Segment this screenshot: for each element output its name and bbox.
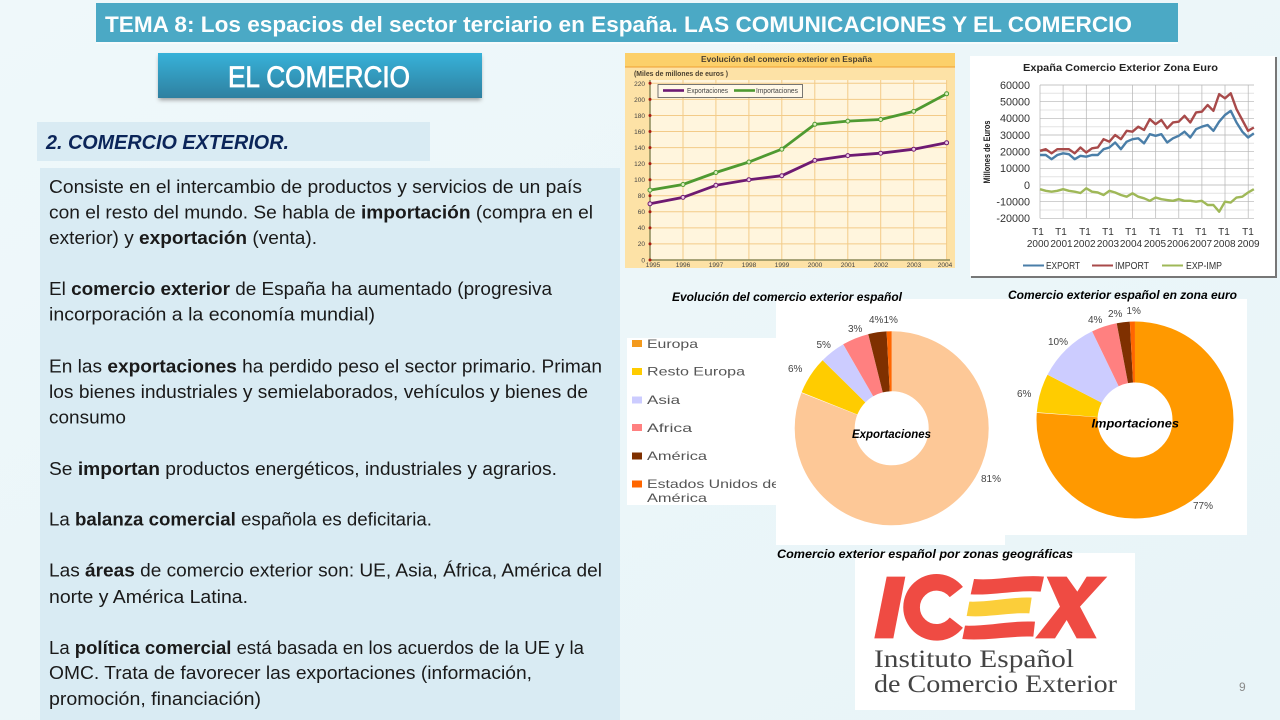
- percentage labels: 6%: [1017, 389, 1032, 400]
- x axis labels: 2002: [1073, 239, 1096, 250]
- paragraph: trade policy: La política comercial está basada en los acuerdos de la UE y la: [49, 638, 585, 658]
- x axis labels: 2007: [1190, 239, 1213, 250]
- legend: zonas geográficas: América: [647, 491, 707, 505]
- x axis labels: 1996: [676, 262, 691, 269]
- percentage labels: 5%: [816, 340, 831, 351]
- panel: body text: [40, 168, 620, 720]
- x axis labels: 2001: [841, 262, 856, 269]
- line: importaciones: [648, 92, 949, 192]
- x axis labels: T1: [1218, 227, 1230, 238]
- title text: TEMA 8: Los espacios del sector terciario en España. LAS COMUNICACIONES Y EL COMERCIO: [105, 12, 1132, 37]
- x axis labels: 2005: [1144, 239, 1167, 250]
- line chart: España Comercio Exterior Zona Euro: Expaña Comercio Exterior Zona Euro: [1023, 62, 1218, 74]
- paragraph: definition: Consiste en el intercambio de productos y servicios de un país: [49, 177, 582, 197]
- y axis labels: 40000: [1000, 113, 1030, 125]
- line chart: España Comercio Exterior Zona Euro: [970, 56, 1277, 278]
- heading button: EL COMERCIO: [158, 53, 482, 100]
- legend: zonas geográficas: Africa: [647, 421, 692, 435]
- logo: ICEX: de Comercio Exterior: [874, 671, 1118, 698]
- x axis labels: 2006: [1167, 239, 1190, 250]
- caption: zona euro: Comercio exterior español en zona euro: [1008, 288, 1237, 302]
- paragraph: areas: [49, 560, 602, 607]
- x axis labels: 1998: [742, 262, 757, 269]
- x axis labels: T1: [1195, 227, 1207, 238]
- y axis labels: 200: [634, 97, 645, 104]
- x axis labels: T1: [1079, 227, 1091, 238]
- paragraph: trade policy: OMC. Trata de favorecer las exportaciones (información,: [49, 663, 532, 683]
- x axis labels: T1: [1102, 227, 1114, 238]
- x axis labels: 2003: [907, 262, 922, 269]
- x axis labels: [1027, 227, 1260, 250]
- series lines: [1040, 93, 1254, 212]
- x axis labels: 1997: [709, 262, 724, 269]
- caption: evolución: Evolución del comercio exterior español: [672, 290, 903, 304]
- x axis labels: 2000: [1027, 239, 1050, 250]
- chart legend: Importaciones: [756, 88, 798, 95]
- legend: zonas geográficas: Asia: [647, 393, 680, 407]
- y axis labels: -20000: [996, 213, 1030, 225]
- y axis labels: 40: [638, 225, 645, 232]
- y axis labels: 20000: [1000, 146, 1030, 158]
- paragraph: exports: [49, 356, 602, 428]
- x axis labels: 2004: [938, 262, 953, 269]
- x axis labels: T1: [1149, 227, 1161, 238]
- y axis labels: 140: [634, 145, 645, 152]
- percentage labels: [1017, 306, 1213, 512]
- letter E: flag bands: [962, 576, 1044, 639]
- paragraph: trade policy: [49, 638, 585, 709]
- donut chart: exportaciones: [776, 299, 1005, 545]
- legend: zonas geográficas: [627, 337, 780, 505]
- chart legend: [1023, 260, 1222, 272]
- x axis labels: T1: [1032, 227, 1044, 238]
- x axis labels: 2003: [1097, 239, 1120, 250]
- caption: zonas geográficas: Comercio exterior español por zonas geográficas: [777, 547, 1073, 561]
- chart legend: IMPORT: [1115, 260, 1149, 272]
- percentage labels: 81%: [981, 474, 1001, 485]
- chart legend: EXP-IMP: [1186, 260, 1222, 272]
- percentage labels: [788, 315, 1001, 485]
- paragraph: imports: Se importan productos energéticos, industriales y agrarios.: [49, 459, 557, 479]
- paragraph: exports: consumo: [49, 408, 126, 428]
- paragraph: definition: [49, 177, 593, 248]
- percentage labels: 10%: [1048, 337, 1068, 348]
- y axis labels: 80: [638, 193, 645, 200]
- y axis labels: [634, 81, 645, 264]
- y axis labels: 50000: [1000, 96, 1030, 108]
- title bar: [96, 3, 1178, 44]
- letter X: [1035, 577, 1107, 638]
- y axis title: Millones de Euros: [982, 120, 992, 184]
- x axis labels: 2008: [1213, 239, 1236, 250]
- y axis labels: 20: [638, 241, 645, 248]
- percentage labels: 1%: [1126, 306, 1141, 317]
- x axis labels: T1: [1055, 227, 1067, 238]
- legend: zonas geográficas: América: [647, 449, 707, 463]
- paragraph: exports: En las exportaciones ha perdido peso el sector primario. Priman: [49, 356, 602, 376]
- legend: zonas geográficas: Estados Unidos de: [647, 477, 780, 491]
- x axis labels: 1999: [775, 262, 790, 269]
- letter C: [912, 582, 956, 632]
- paragraph: areas: Las áreas de comercio exterior son: UE, Asia, África, América del: [49, 560, 602, 580]
- x axis labels: 2002: [874, 262, 889, 269]
- y axis labels: 60000: [1000, 80, 1030, 92]
- x axis labels: 1995: [646, 262, 661, 269]
- line chart: Evolución del comercio exterior en España: [625, 53, 955, 269]
- y axis labels: 0: [641, 258, 645, 264]
- letter I: [874, 577, 905, 638]
- y axis labels: 220: [634, 81, 645, 88]
- line chart: Evolución del comercio exterior en España: (Miles de millones de euros ): [634, 69, 728, 78]
- paragraph: areas: norte y América Latina.: [49, 587, 248, 607]
- y axis labels: [996, 80, 1030, 225]
- paragraph: exports: los bienes industriales y semielaborados, vehículos y bienes de: [49, 382, 588, 402]
- percentage labels: 77%: [1193, 501, 1213, 512]
- logo text: Instituto Español: [874, 646, 1074, 673]
- legend: zonas geográficas: Europa: [647, 337, 698, 351]
- x axis labels: [646, 262, 953, 269]
- x axis labels: 2009: [1237, 239, 1260, 250]
- donut chart: importaciones: [1005, 299, 1247, 535]
- chart legend: EXPORT: [1046, 260, 1080, 272]
- y axis labels: 120: [634, 161, 645, 168]
- heading button: EL COMERCIO: EL COMERCIO: [228, 61, 410, 94]
- paragraph: definition: con el resto del mundo. Se habla de importación (compra en el: [49, 202, 593, 222]
- line: exportaciones: [648, 141, 949, 206]
- paragraph: growth: [49, 279, 553, 324]
- x axis labels: 2004: [1120, 239, 1143, 250]
- y axis labels: 180: [634, 113, 645, 120]
- paragraph: trade balance: La balanza comercial española es deficitaria.: [49, 510, 432, 530]
- logo: ICEX: [855, 553, 1135, 710]
- percentage labels: 4%: [1088, 315, 1103, 326]
- chart legend: [658, 84, 802, 98]
- y axis labels: 160: [634, 129, 645, 136]
- y axis labels: 0: [1024, 180, 1030, 192]
- paragraph: growth: El comercio exterior de España ha aumentado (progresiva: [49, 279, 553, 299]
- y axis labels: 60: [638, 209, 645, 216]
- y axis dots: [648, 82, 652, 262]
- line chart: Evolución del comercio exterior en España: Evolución del comercio exterior en España: [701, 55, 873, 64]
- slide number: 9: [1239, 680, 1246, 694]
- x axis labels: T1: [1242, 227, 1254, 238]
- x axis labels: T1: [1172, 227, 1184, 238]
- y axis labels: 100: [634, 177, 645, 184]
- y axis labels: 10000: [1000, 163, 1030, 175]
- y axis labels: -10000: [996, 196, 1030, 208]
- percentage labels: 4%1%: [869, 315, 898, 326]
- donut label: Exportaciones: [852, 427, 931, 441]
- paragraph: growth: incorporación a la economía mundial): [49, 304, 375, 324]
- percentage labels: 2%: [1108, 309, 1123, 320]
- percentage labels: 3%: [848, 324, 863, 335]
- x axis labels: T1: [1125, 227, 1137, 238]
- percentage labels: 6%: [788, 364, 803, 375]
- y axis labels: 30000: [1000, 130, 1030, 142]
- section heading: 2. COMERCIO EXTERIOR.: [45, 131, 289, 154]
- donut label: Importaciones: [1092, 416, 1179, 430]
- section heading: [37, 122, 430, 161]
- paragraph: trade policy: promoción, financiación): [49, 689, 261, 709]
- x axis labels: 2000: [808, 262, 823, 269]
- legend: zonas geográficas: Resto Europa: [647, 364, 745, 378]
- x axis labels: 2001: [1050, 239, 1073, 250]
- chart legend: Exportaciones: [687, 88, 728, 95]
- paragraph: definition: exterior) y exportación (venta).: [49, 228, 317, 248]
